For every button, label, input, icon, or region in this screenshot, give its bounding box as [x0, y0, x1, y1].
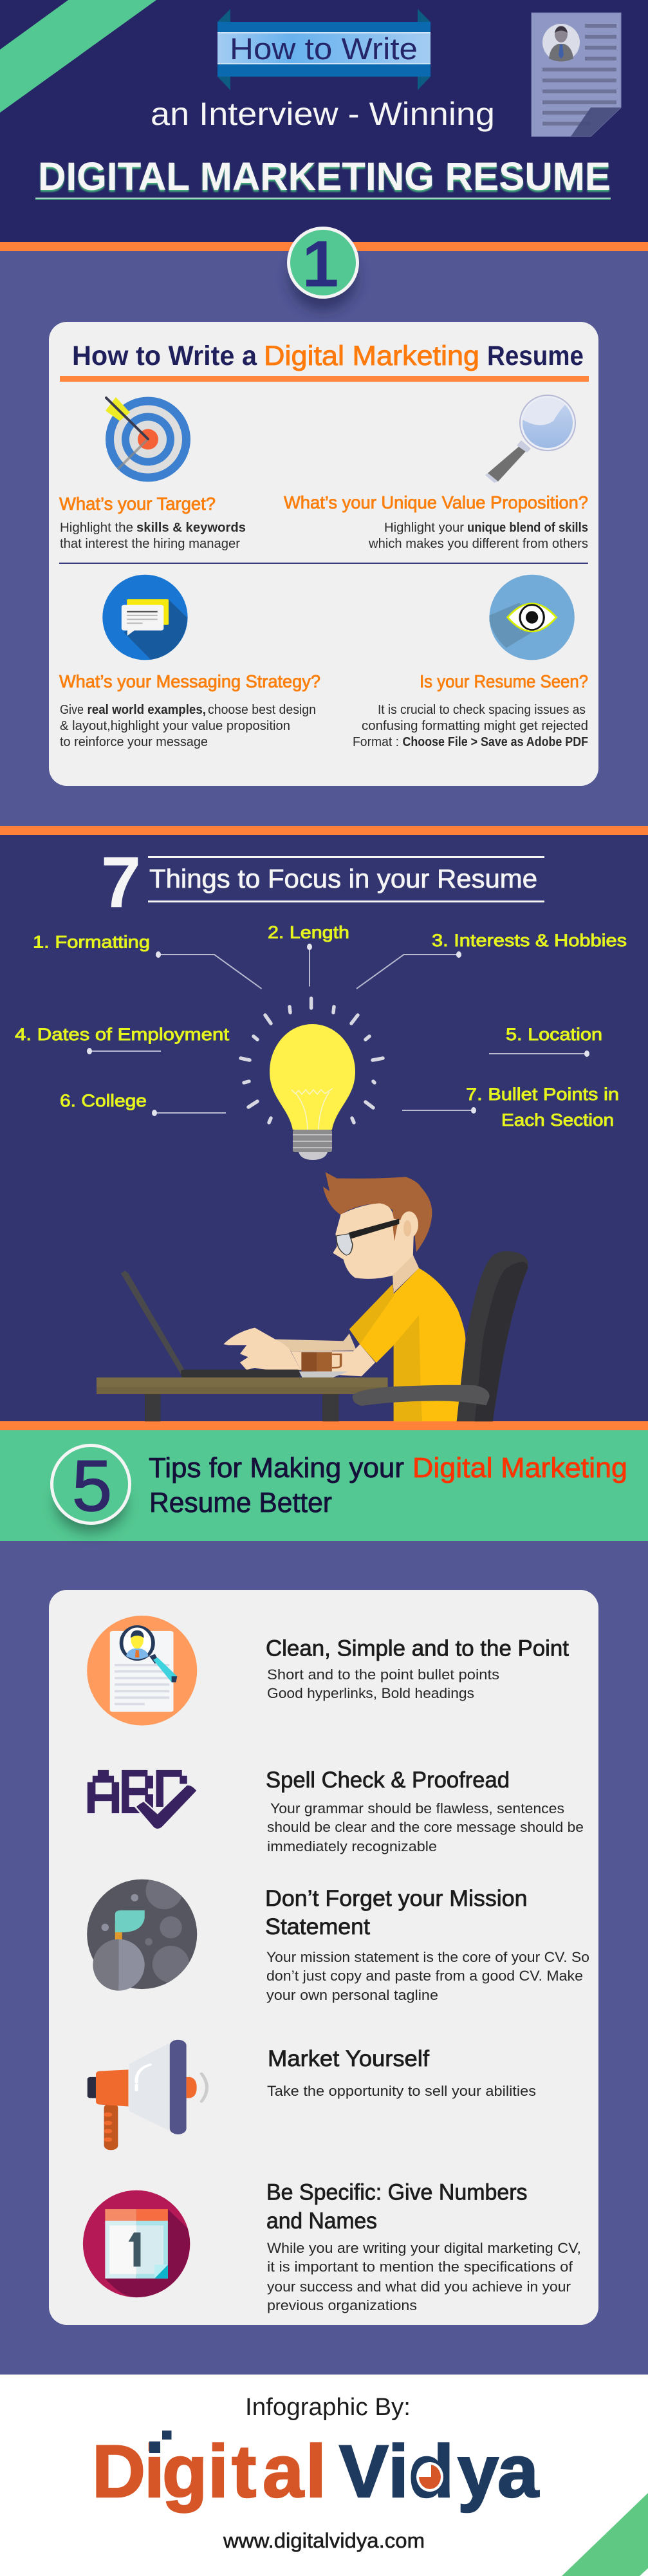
text: spell check: should be clear and the core message should be: [267, 1819, 584, 1835]
text: resume seen: [353, 671, 588, 749]
panel heading: How to Write a: [72, 341, 257, 371]
text: target: skills & keywords: [136, 520, 246, 535]
text: be specific: While you are writing your digital marketing CV,: [267, 2240, 581, 2256]
icon: light bulb with rays: [241, 998, 383, 1160]
text: mission statement: Don’t Forget your Mission: [265, 1886, 528, 1911]
section heading: 5 tips: Digital Marketing: [412, 1452, 627, 1484]
section heading: 5 tips: Tips for Making your: [149, 1452, 404, 1484]
labels: seven focus items: 5. Location: [506, 1025, 602, 1044]
laptop: [121, 1271, 300, 1377]
ribbon: How to Write: How to Write: [230, 32, 418, 66]
text: be specific: and Names: [266, 2208, 377, 2234]
panel heading: Digital Marketing: [264, 341, 479, 371]
text: clean simple: Good hyperlinks, Bold headings: [267, 1685, 474, 1701]
text: be specific: Be Specific: Give Numbers: [266, 2179, 528, 2205]
text: unique value proposition: unique blend of skills: [467, 520, 588, 535]
labels: seven focus items: 6. College: [60, 1091, 147, 1110]
labels: seven focus items: 3. Interests & Hobbies: [432, 931, 627, 950]
text: resume seen: Format :: [353, 734, 399, 749]
section heading: 7 things: [101, 842, 544, 922]
decorative corner stripe: [0, 0, 156, 113]
panel heading: Resume: [487, 341, 584, 371]
icon: resume document: [532, 13, 621, 136]
text: resume seen: confusing formatting might get rejected: [362, 718, 588, 733]
text: market yourself: Market Yourself: [268, 2046, 429, 2071]
icon: planet with flag: [87, 1872, 197, 1991]
section heading: 5 tips: Resume Better: [149, 1487, 332, 1518]
text: spell check: Your grammar should be flawless, sentences: [270, 1800, 564, 1816]
website: www.digitalvidya.com: [223, 2529, 425, 2552]
labels: seven focus items: 7. Bullet Points in: [466, 1085, 619, 1104]
text: be specific: previous organizations: [267, 2297, 417, 2313]
icon: messaging bubble: [102, 575, 188, 660]
shirt: [349, 1268, 465, 1421]
badge: number 5: [51, 1446, 130, 1533]
text: messaging strategy: choose best design: [208, 702, 316, 717]
section heading: 5 tips: [51, 1446, 627, 1533]
text: be specific: your success and what did you achieve in your: [267, 2279, 571, 2295]
panel: how to write: [49, 322, 598, 786]
badge: number 1: 1: [302, 227, 338, 301]
text: market yourself: [267, 2046, 536, 2099]
text: mission statement: your own personal tagline: [266, 1987, 438, 2003]
text: messaging strategy: real world examples,: [88, 702, 206, 717]
text: messaging strategy: Give: [60, 702, 84, 717]
labels: seven focus items: [15, 923, 627, 1130]
text: clean simple: Short and to the point bullet points: [267, 1666, 499, 1683]
head: [323, 1172, 432, 1293]
text: spell check: immediately recognizable: [267, 1838, 437, 1854]
connector lines: [87, 944, 589, 1116]
text: target: [59, 494, 246, 551]
footer: [92, 2394, 648, 2576]
section heading: 7 things: Things to Focus in your Resume: [149, 864, 537, 893]
text: spell check: [266, 1768, 584, 1854]
text: messaging strategy: & layout,highlight your value proposition: [60, 718, 290, 733]
panel heading: [60, 341, 589, 382]
text: mission statement: Your mission statement is the core of your CV. So: [266, 1949, 589, 1965]
text: messaging strategy: [59, 671, 320, 749]
text: target: that interest the hiring manager: [60, 536, 240, 551]
icon: target: [106, 397, 190, 481]
text: messaging strategy: to reinforce your message: [60, 734, 208, 749]
icon: ABC spell check: [88, 1770, 198, 1829]
icon: resume under magnifier: [87, 1616, 197, 1726]
labels: seven focus items: 2. Length: [268, 923, 349, 942]
title banner: DIGITAL MARKETING RESUME: [38, 154, 611, 198]
text: unique value proposition: Highlight your: [384, 520, 464, 535]
badge: number 5: 5: [72, 1446, 112, 1526]
text: messaging strategy: What’s your Messaging Strategy?: [59, 671, 320, 691]
panel: five tips: [49, 1590, 598, 2325]
text: be specific: it is important to mention the specifications of: [267, 2259, 573, 2275]
arms: [223, 1328, 375, 1376]
text: unique value proposition: [284, 492, 588, 551]
text: resume seen: It is crucial to check spacing issues as: [378, 702, 586, 717]
logo: Digital Vidya: [92, 2431, 539, 2513]
icon: megaphone: [88, 2040, 207, 2150]
text: clean simple: [266, 1636, 569, 1701]
text: target: What’s your Target?: [59, 494, 216, 514]
illustration: man at laptop: [97, 1172, 528, 1421]
text: unique value proposition: which makes you different from others: [368, 536, 588, 551]
text: resume seen: Choose File > Save as Adobe PDF: [403, 734, 588, 749]
labels: seven focus items: Each Section: [501, 1110, 614, 1130]
text: be specific: [266, 2179, 581, 2313]
text: mission statement: [265, 1886, 589, 2003]
labels: seven focus items: 4. Dates of Employment: [15, 1025, 230, 1044]
section heading: 7 things: 7: [101, 842, 141, 922]
subtitle: an Interview - Winning: [151, 96, 495, 132]
green corner stripe: [562, 2493, 648, 2576]
chair armrest: [353, 1385, 490, 1406]
coffee cup: [299, 1351, 348, 1378]
text: resume seen: Is your Resume Seen?: [420, 671, 588, 691]
header section: [0, 0, 621, 200]
credit line: Infographic By:: [245, 2394, 411, 2421]
text: clean simple: Clean, Simple and to the Point: [266, 1636, 569, 1661]
text: target: Highlight the: [60, 520, 133, 535]
ribbon: How to Write: [218, 9, 430, 90]
text: mission statement: Statement: [265, 1914, 370, 1939]
text: spell check: Spell Check & Proofread: [266, 1768, 510, 1793]
icon: magnifying glass: [485, 395, 575, 483]
text: unique value proposition: What’s your Unique Value Proposition?: [284, 492, 588, 512]
logo: Digital Vidya: Digital: [92, 2431, 326, 2513]
text: mission statement: don’t just copy and paste from a good CV. Make: [266, 1968, 583, 1984]
labels: seven focus items: 1. Formatting: [33, 932, 150, 951]
logo: Digital Vidya: Vidya: [339, 2431, 539, 2513]
icon: eye: [489, 575, 575, 660]
badge: number 1: [288, 227, 358, 310]
text: market yourself: Take the opportunity to sell your abilities: [267, 2083, 536, 2099]
chair back: [457, 1251, 528, 1421]
icon: calendar: [83, 2190, 190, 2297]
desk: [97, 1377, 388, 1421]
